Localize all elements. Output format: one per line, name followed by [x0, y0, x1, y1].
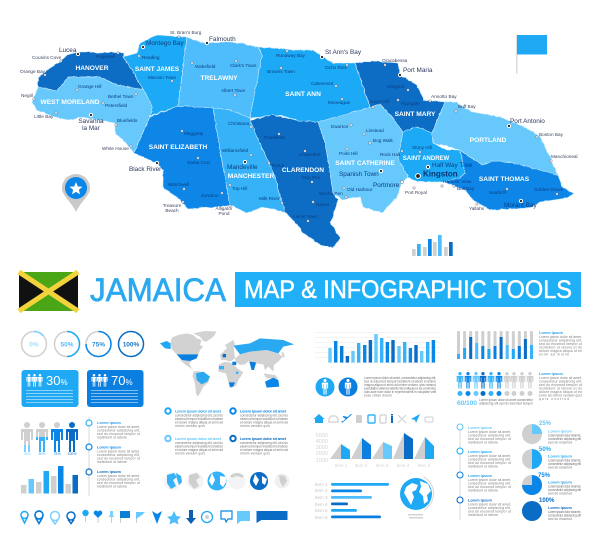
bar chart top center	[315, 332, 440, 363]
center text block: duis aute irure dolor in reprehenderit in voluptate velit	[364, 390, 436, 394]
region names: SAINT ANN	[285, 91, 321, 98]
city labels inside the regions: Porus	[272, 163, 285, 168]
gauge text: Lorem Ipsum	[539, 331, 563, 335]
city labels outside the coast: Negril	[21, 93, 33, 98]
city labels outside the coast: Buff Bay	[458, 104, 476, 109]
world map legend: consectetur adipiscing elit, sed do	[175, 441, 223, 445]
people row 60/100: incididunt ut labore et do	[539, 386, 582, 390]
vertical timeline left: incididunt ut labore	[97, 436, 127, 440]
people row 60/100: sed do eiusmod tempor ut	[539, 383, 582, 387]
pie chart text: Lorem Ipsum	[548, 506, 572, 510]
vertical timeline left: sed do eiusmod tempor ut	[97, 456, 140, 460]
area chart: 1000	[316, 458, 328, 464]
panel: 70%	[87, 370, 144, 407]
city labels inside the regions: Harbour View	[443, 179, 472, 184]
icon: pin dark	[35, 511, 43, 524]
region: Saint Ann	[250, 47, 370, 122]
city labels inside the regions: Ocho Rios	[325, 65, 348, 70]
city labels outside the coast: Oracabessa	[382, 58, 408, 63]
icon: round pin	[82, 510, 89, 522]
city labels inside the regions: Wakefield	[195, 64, 216, 69]
city labels outside the coast: Boston Bay	[539, 132, 564, 137]
city labels outside the coast: Manchioneal	[551, 154, 578, 159]
icon: speech bubble outline	[221, 511, 232, 522]
vertical timeline left: consectetur adipiscing elit,	[97, 478, 140, 482]
icon: airplane	[342, 414, 352, 423]
region: Portland	[432, 102, 558, 175]
city labels inside the regions: Hayes	[316, 202, 330, 207]
vertical timeline left: Lorem Ipsum	[97, 470, 121, 474]
city labels inside the regions: Rock Hall	[380, 152, 400, 157]
city labels inside the regions: Clark's Town	[230, 63, 257, 68]
small globes	[164, 472, 290, 490]
pie charts: 25%	[539, 421, 552, 427]
city labels outside the coast: Little Bay	[34, 114, 54, 119]
vertical timeline left: consectetur adipiscing elit,	[97, 453, 140, 457]
city labels inside the regions: Milk River	[259, 196, 280, 201]
city labels inside the regions: Old Harbour	[347, 187, 373, 192]
city labels inside the regions: Christiana	[228, 121, 249, 126]
people row 60/100: adipiscing elit sed do eiusmod tempor	[479, 402, 534, 406]
gauge bars	[457, 331, 533, 359]
city labels inside the regions: Bog Walk	[373, 138, 394, 143]
area chart: Item 2	[355, 463, 368, 468]
pie chart text: consectetur adipiscing elit	[548, 488, 581, 492]
region names: CLARENDON	[282, 167, 324, 174]
icon: information	[391, 414, 393, 423]
region names: PORTLAND	[470, 137, 507, 144]
vertical timeline right: sed do eiusmod tempor ut	[468, 437, 511, 441]
people percent chart: 25%	[23, 452, 31, 456]
world map legend: consectetur adipiscing elit, sed do	[240, 441, 288, 445]
travel icons row	[314, 414, 433, 423]
people row 60/100: dolore magna aliqua ut en	[539, 390, 582, 394]
gauge text: enim ad minim	[539, 352, 569, 356]
world map legend: et dolore magna aliqua ut enim ad	[175, 448, 223, 452]
icon: pennant	[136, 512, 145, 523]
region: Westmoreland	[32, 77, 153, 153]
pie chart text: Lorem Ipsum	[548, 430, 572, 434]
vertical timeline right: sed do eiusmod tempor ut	[468, 510, 511, 514]
city labels outside the coast: Treasure	[163, 203, 182, 208]
city labels inside the regions: Maroon Town	[148, 75, 176, 80]
people percent chart: 75%	[53, 452, 61, 456]
vertical timeline left	[86, 417, 140, 496]
people row 60/100: quis nostrud	[539, 397, 569, 401]
city labels inside the regions: Half Way Tree	[432, 162, 473, 169]
world map legend: Lorem ipsum dolor sit amet	[175, 437, 222, 441]
region: Saint Andrew	[398, 127, 465, 182]
world map legend: consectetur adipiscing elit, sed do	[240, 414, 288, 418]
people row 60/100: consectetur adipiscing elit,	[539, 380, 582, 384]
vertical timeline right: Lorem ipsum dolor sit amet,	[468, 478, 511, 482]
city labels inside the regions: Islington	[387, 84, 405, 89]
city labels outside the coast: Orange Bay	[20, 69, 46, 74]
city labels inside the regions: Williamsfield	[222, 148, 248, 153]
city labels outside the coast: Black River	[129, 166, 162, 173]
area chart: 5000	[316, 433, 328, 439]
region: Trelawny	[178, 37, 262, 118]
people row 60/100: Lorem ipsum dolor sit amet,	[539, 376, 582, 380]
vertical timeline left: Lorem ipsum dolor sit amet,	[97, 474, 140, 478]
horizontal bar chart: Item 6	[315, 515, 328, 520]
percentage rings: 0%	[29, 342, 39, 348]
people percent chart: 100%	[68, 452, 76, 456]
region names: HANOVER	[76, 65, 109, 72]
city labels inside the regions: Guys Hill	[370, 99, 389, 104]
region names: SAINT THOMAS	[479, 176, 530, 183]
city labels inside the regions: Bull Bay	[457, 186, 475, 191]
center text block: esse cillum dolore	[364, 394, 392, 398]
center text block: Lorem ipsum dolor sit amet, consectetur adipiscing elit,	[364, 376, 436, 380]
vertical timeline left: consectetur adipiscing elit,	[97, 428, 140, 432]
world map legend: et dolore magna aliqua ut enim ad	[240, 448, 288, 452]
city labels inside the regions	[76, 40, 564, 222]
city labels inside the regions: Maggotty	[184, 131, 204, 136]
city labels outside the coast: Port Maria	[403, 67, 433, 74]
area chart: 4000	[316, 439, 328, 445]
vertical timeline right: incididunt ut labore	[468, 513, 498, 517]
region names: SAINT ANDREW	[403, 156, 450, 162]
pie chart text	[548, 430, 581, 521]
world map legend	[165, 408, 288, 456]
region: Saint James	[123, 35, 187, 116]
icon: heart pin	[94, 511, 102, 523]
city labels outside the coast: St. Bran's Burg	[170, 30, 202, 35]
city labels outside the coast: White House	[102, 146, 129, 151]
vertical timeline right: consectetur adipiscing elit,	[468, 458, 511, 462]
city labels inside the regions: Seaforth	[489, 190, 507, 195]
region names: MANCHESTER	[228, 173, 274, 180]
vertical timeline left: incididunt ut labore	[97, 484, 127, 488]
large globe	[400, 477, 434, 518]
icon: bus	[368, 415, 375, 423]
vertical timeline right: Lorem ipsum dolor sit amet,	[468, 430, 511, 434]
icon: cutlery	[398, 415, 406, 423]
vertical timeline left: Lorem Ipsum	[97, 446, 121, 450]
city labels inside the regions: Chapelton	[299, 152, 321, 157]
gauge text: Lorem ipsum dolor sit amet,	[539, 335, 582, 339]
center text block: sed do eiusmod tempor incididunt ut labore et dolore	[364, 380, 436, 384]
area chart: Item 4	[397, 463, 410, 468]
people percent chart	[21, 422, 78, 456]
pie charts: 50%	[539, 447, 552, 453]
vertical timeline right: incididunt ut labore	[468, 488, 498, 492]
people row 60/100	[457, 372, 582, 407]
vertical timeline right: sed do eiusmod tempor ut	[468, 485, 511, 489]
horizontal bar chart: Item 2	[315, 488, 328, 493]
world map legend: consectetur adipiscing elit, sed do	[175, 414, 223, 418]
icon: target	[202, 512, 212, 522]
city labels outside the coast: St Ann's Bay	[325, 49, 362, 56]
people row 60/100: 60/100	[457, 400, 477, 407]
gauge text: dolore magna aliqua ut en	[539, 349, 582, 353]
pie chart text: consectetur adipiscing elit	[548, 462, 581, 466]
icon: pin pale	[50, 512, 60, 524]
vertical timeline right: Lorem Ipsum	[468, 450, 492, 454]
city labels inside the regions: Mocho Pen	[319, 191, 343, 196]
icon: bed	[425, 417, 433, 422]
area chart: Item 3	[376, 463, 389, 468]
region names	[41, 65, 530, 183]
city labels inside the regions: Point Hill	[339, 151, 358, 156]
pie charts	[522, 421, 555, 521]
city labels inside the regions: Moneague	[328, 100, 351, 105]
city labels outside the coast: Beach	[165, 208, 179, 213]
people percent chart: 50%	[38, 452, 46, 456]
vertical timeline right: Lorem ipsum dolor sit amet,	[468, 454, 511, 458]
city labels inside the regions: Top Hill	[232, 186, 247, 191]
percentage rings	[22, 332, 144, 356]
region: Saint Elizabeth	[134, 106, 231, 209]
world map legend: eiusmod tempor incididunt ut labore	[240, 417, 288, 421]
city labels inside the regions: Reading	[142, 55, 160, 60]
region: Hanover	[38, 52, 143, 91]
panel: 70%: 70%	[111, 373, 133, 388]
panel: 30%	[22, 370, 78, 407]
city labels inside the regions: Calvemont	[311, 81, 334, 86]
pie chart text: consectetur adipiscing elit	[548, 437, 581, 441]
pie chart text: sed do eiusmod	[548, 517, 572, 521]
subtitle banner: MAP & INFOGRAPHIC TOOLS	[244, 276, 572, 304]
pie chart text: Lorem ipsum dolor sit amet,	[548, 510, 581, 514]
vertical timeline left: Lorem ipsum dolor sit amet,	[97, 425, 140, 429]
world map legend: minim veniam quis	[175, 452, 205, 456]
city labels inside the regions: Montego Bay	[146, 40, 184, 47]
horizontal bar chart: Item 4	[315, 502, 328, 507]
city labels inside the regions: Portmore	[373, 182, 400, 189]
city labels inside the regions: May Pen	[302, 175, 321, 180]
icon: paper plane	[411, 414, 420, 423]
city labels outside the coast: Annotto Bay	[431, 94, 457, 99]
vertical timeline left: sed do eiusmod tempor ut	[97, 481, 140, 485]
city labels inside the regions: Popewell	[96, 54, 115, 59]
city labels inside the regions: Highgate	[401, 101, 420, 106]
city labels inside the regions: Grange Hill	[78, 84, 101, 89]
city labels inside the regions: Golden Grove	[534, 187, 564, 192]
city labels outside the coast: Port Royal	[405, 190, 427, 195]
city labels inside the regions: Mandeville	[227, 164, 258, 171]
city labels inside the regions: Frankfield	[264, 135, 285, 140]
icon: speech bubble fill	[237, 511, 250, 524]
area chart: Item 1	[335, 463, 348, 468]
percentage rings: 75%	[92, 342, 105, 348]
icon: large speech banner	[256, 511, 288, 523]
region names: TRELAWNY	[200, 75, 238, 82]
pie chart text: sed do eiusmod	[548, 492, 572, 496]
city labels inside the regions: Morant Bay	[504, 202, 537, 209]
pie charts: 75%	[538, 473, 551, 479]
harbour	[402, 181, 438, 193]
region names: SAINT MARY	[395, 111, 436, 118]
vertical timeline right: incididunt ut labore	[468, 464, 498, 468]
city labels outside the coast: Falmouth	[209, 36, 236, 43]
area chart: Item 5	[418, 463, 431, 468]
city labels inside the regions: Junction	[201, 193, 219, 198]
city labels inside the regions: Albert Town	[221, 88, 246, 93]
pie charts: 100%	[539, 498, 555, 504]
world map legend: minim veniam quis	[240, 452, 270, 456]
city labels inside the regions: Bethel Town	[108, 94, 134, 99]
city labels inside the regions: Linstead	[366, 128, 384, 133]
city labels outside the coast: Alligator	[216, 206, 233, 211]
vertical timeline right: incididunt ut labore	[468, 440, 498, 444]
region: Saint Thomas	[443, 150, 574, 210]
world map legend: eiusmod tempor incididunt ut labore	[175, 417, 223, 421]
city labels outside the coast: Pond	[219, 211, 230, 216]
city labels inside the regions: Lionel Town	[293, 214, 318, 219]
city labels inside the regions: Santa Cruz	[187, 160, 211, 165]
icon: down arrow	[186, 510, 196, 524]
city labels inside the regions: Spanish Town	[339, 171, 379, 178]
panel: 30%: 30%	[46, 373, 68, 388]
region: Saint Catherine	[318, 104, 408, 213]
pie chart text: Lorem Ipsum	[548, 480, 572, 484]
icon: flag dark	[120, 511, 130, 523]
world map legend: Lorem ipsum dolor sit amet	[240, 437, 287, 441]
city labels outside the coast: Port Antonio	[510, 118, 545, 125]
city labels outside the coast: Yallahs	[469, 206, 485, 211]
people row 60/100: Lorem ipsum dolor sit amet consectetur	[479, 398, 534, 402]
icon: pushpin	[108, 511, 114, 523]
world map legend: Lorem ipsum dolor sit amet	[240, 410, 287, 414]
world map legend: et dolore magna aliqua ut enim ad	[175, 420, 223, 424]
vertical timeline left: Lorem ipsum dolor sit amet,	[97, 450, 140, 454]
gauge text	[539, 331, 582, 356]
city labels inside the regions: Watchwell	[168, 182, 189, 187]
icon: house	[314, 414, 324, 423]
region: Manchester	[213, 108, 285, 213]
region names: SAINT JAMES	[135, 66, 180, 73]
center text block: magna aliqua ut enim ad minim veniam, quis nostrud	[364, 383, 436, 387]
world map legend: minim veniam quis	[240, 424, 270, 428]
horizontal bar chart: Item 3	[315, 495, 328, 500]
vertical timeline right: Lorem Ipsum	[468, 474, 492, 478]
city labels inside the regions: Kingston	[423, 170, 458, 178]
city labels inside the regions: Ewarton	[331, 124, 349, 129]
region: Saint Mary	[355, 61, 445, 133]
flag of Jamaica	[19, 272, 78, 311]
world map legend: et dolore magna aliqua ut enim ad	[240, 420, 288, 424]
vertical timeline left: sed do eiusmod tempor ut	[97, 432, 140, 436]
person circles	[316, 378, 358, 396]
vertical timeline left: Lorem Ipsum	[97, 421, 121, 425]
horizontal bar chart: Item 1	[315, 482, 328, 487]
area chart: 2000	[316, 451, 328, 457]
gauge text: incididunt ut labore et do	[539, 346, 582, 350]
region names: SAINT CATHERINE	[335, 160, 395, 167]
area chart	[316, 433, 434, 468]
city labels outside the coast: Savanna	[78, 118, 104, 125]
area chart: 3000	[316, 445, 328, 451]
world map legend: eiusmod tempor incididunt ut labore	[175, 444, 223, 448]
horizontal bar chart	[315, 482, 389, 520]
center text block	[364, 376, 436, 398]
pie chart text: sed do eiusmod	[548, 466, 572, 470]
people row 60/100: enim ad minim veniam quis	[539, 394, 582, 398]
city labels outside the coast: Cousins Cove	[32, 55, 62, 60]
city labels inside the regions: Bluefields	[117, 118, 138, 123]
icon: pin light	[21, 512, 28, 523]
vertical timeline right: consectetur adipiscing elit,	[468, 482, 511, 486]
icon: train	[356, 415, 362, 423]
horizontal bar chart: Item 5	[315, 508, 328, 513]
icon: car	[329, 416, 338, 422]
small bar chart under map	[412, 235, 453, 256]
vertical timeline right	[457, 424, 511, 520]
vertical timeline right: consectetur adipiscing elit,	[468, 506, 511, 510]
icon: pin navy	[67, 512, 75, 524]
center text block: exercitation ullamco laboris nisi ut aliquip ex ea commodo	[364, 386, 436, 390]
city labels outside the coast: Lucea	[59, 47, 77, 54]
people row 60/100: Lorem Ipsum	[539, 372, 563, 376]
pie chart text: sed do eiusmod	[548, 440, 572, 444]
pie chart text: Lorem ipsum dolor sit amet,	[548, 434, 581, 438]
title: JAMAICA	[90, 272, 227, 308]
region names: WEST MORELAND	[41, 99, 100, 106]
map of Jamaica	[32, 35, 574, 248]
icon: location pin with star	[62, 174, 90, 212]
gauge text: sed do eiusmod tempor ut	[539, 342, 582, 346]
city labels outside the coast: la Mar	[82, 125, 101, 132]
percentage rings: 100%	[123, 342, 140, 348]
city labels outside the coast	[20, 30, 578, 216]
icon: tram	[380, 415, 386, 423]
pie chart text: Lorem ipsum dolor sit amet,	[548, 458, 581, 462]
region: Clarendon	[250, 115, 340, 248]
icon: arrow marker	[152, 511, 162, 524]
city labels inside the regions: Browns Town	[267, 69, 295, 74]
world map legend: Lorem ipsum dolor sit amet	[175, 410, 222, 414]
icon: star	[167, 511, 181, 524]
vertical timeline right: consectetur adipiscing elit,	[468, 434, 511, 438]
world map	[160, 331, 294, 397]
world map legend: eiusmod tempor incididunt ut labore	[240, 444, 288, 448]
pie chart text: consectetur adipiscing elit	[548, 514, 581, 518]
city labels inside the regions: Runaway Bay	[276, 53, 306, 58]
region names: SAINT ELIZABETH	[149, 144, 208, 151]
vertical timeline right: sed do eiusmod tempor ut	[468, 461, 511, 465]
pie chart text: Lorem Ipsum	[548, 454, 572, 458]
world map legend: minim veniam quis	[175, 424, 205, 428]
vertical timeline left: incididunt ut labore	[97, 460, 127, 464]
vertical timeline right: Lorem ipsum dolor sit amet,	[468, 502, 511, 506]
icon row: pins, flags and markers	[21, 510, 288, 524]
gauge text: consectetur adipiscing elit,	[539, 338, 582, 342]
vertical timeline right: Lorem Ipsum	[468, 498, 492, 502]
city labels inside the regions: Stony Hill	[412, 145, 432, 150]
percentage rings: 50%	[60, 342, 74, 348]
city labels inside the regions: Petersfield	[105, 103, 128, 108]
pie chart text: Lorem ipsum dolor sit amet,	[548, 484, 581, 488]
icon: flag on pole	[516, 35, 547, 74]
vertical timeline right: Lorem Ipsum	[468, 426, 492, 430]
bar chart left	[21, 466, 78, 494]
